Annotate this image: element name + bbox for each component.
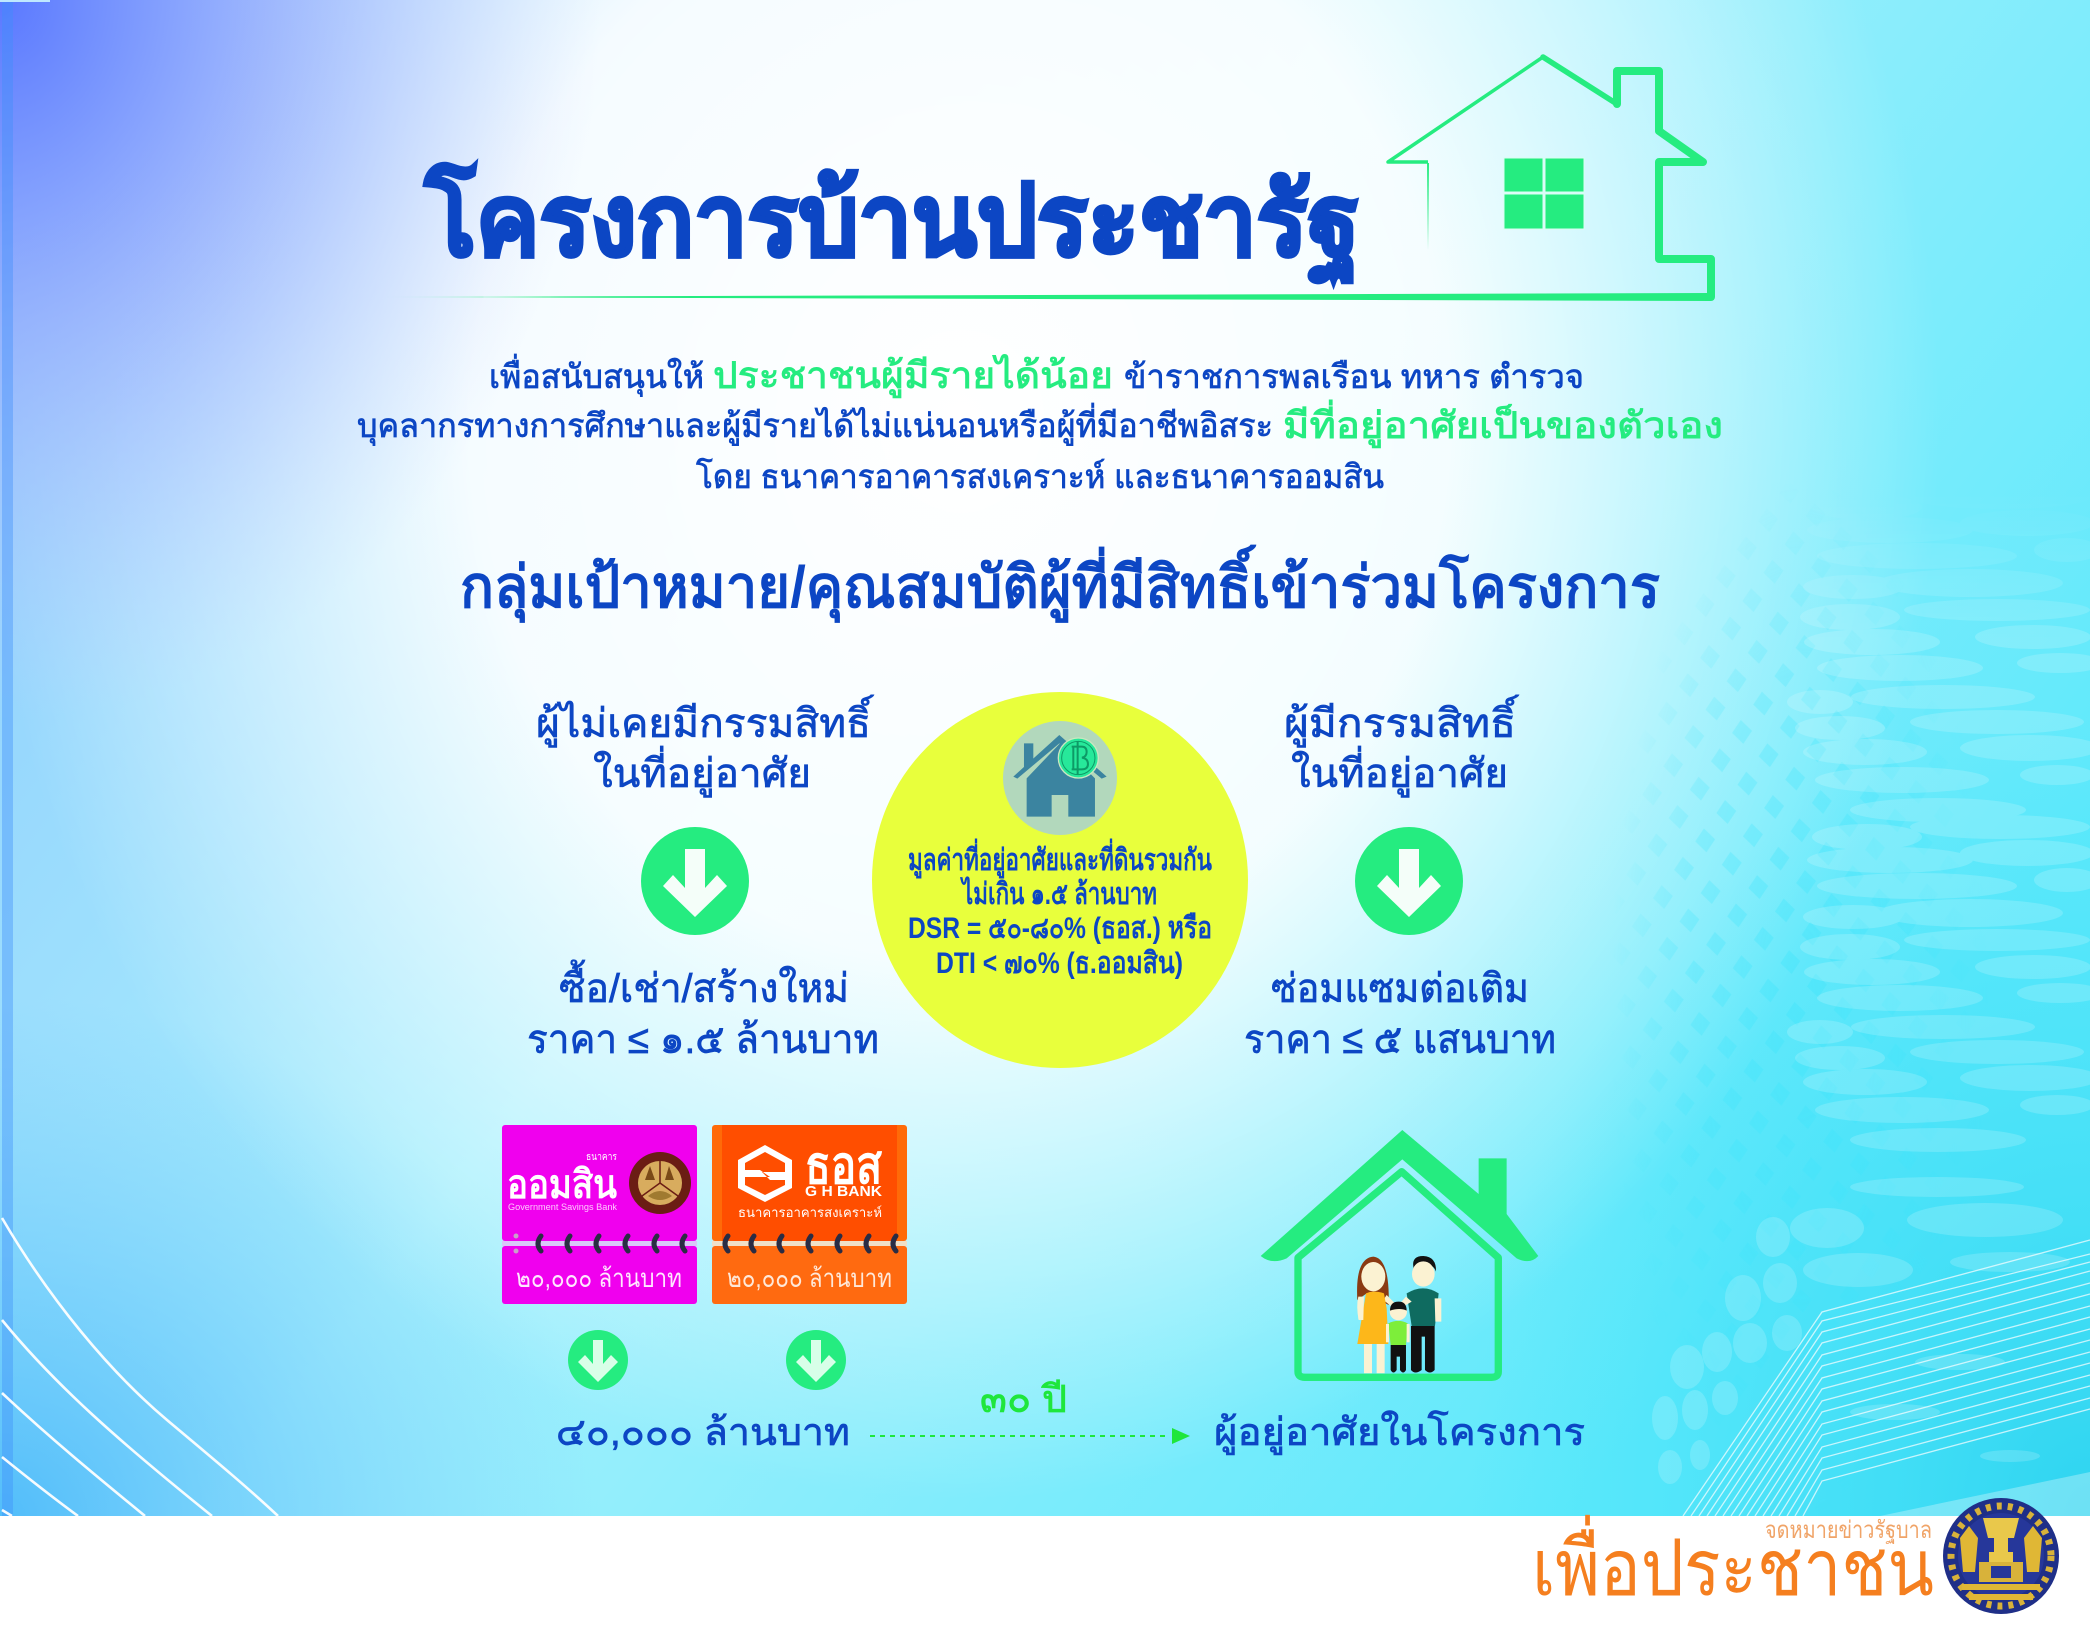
icon: down arrow: [1355, 827, 1463, 935]
right column: owners: ราคา ≤ ๕ แสนบาท: [1244, 1018, 1556, 1062]
panel: GH Bank card: G H BANK: [805, 1183, 882, 1200]
intro paragraph: มีที่อยู่อาศัยเป็นของตัวเอง: [1283, 399, 1723, 448]
icon: GSB seal: [629, 1152, 691, 1214]
decorative left stripe and curves: [2, 0, 13, 1516]
panel: GH Bank card: ธนาคารอาคารสงเคราะห์: [738, 1205, 882, 1220]
panel: GSB card: ออมสิน: [507, 1163, 617, 1207]
arrow: dashed: [870, 1428, 1190, 1444]
footer: brand text: จดหมายข่าวรัฐบาล: [1765, 1517, 1932, 1544]
binder rings: [538, 1236, 685, 1251]
icon: house with baht: [1003, 721, 1117, 835]
title: โครงการบ้านประชารัฐ: [424, 162, 1360, 286]
footer: brand text: เพื่อประชาชน: [1532, 1515, 1934, 1612]
right column: owners: [1244, 694, 1556, 1062]
panel: yellow criteria circle: DSR = ๕๐-๘๐% (ธอส.) หรือ: [908, 912, 1212, 945]
icon: government seal: [1943, 1498, 2059, 1614]
panel: yellow criteria circle: [872, 692, 1248, 1068]
footer: white band: [0, 1516, 2090, 1625]
heading: target group: กลุ่มเป้าหมาย/คุณสมบัติผู้ที่มีสิทธิ์เข้าร่วมโครงการ: [460, 544, 1660, 624]
panel: GSB card: Government Savings Bank: [508, 1202, 618, 1212]
panel: GH Bank card: ธอส: [805, 1137, 882, 1195]
left column: never owned: ในที่อยู่อาศัย: [593, 746, 811, 797]
panel: GSB card: ๒๐,๐๐๐ ล้านบาท: [516, 1263, 682, 1293]
panel: GSB card: ธนาคาร: [586, 1152, 618, 1163]
intro paragraph: เพื่อสนับสนุนให้: [489, 354, 704, 397]
panel: yellow criteria circle: มูลค่าที่อยู่อาศัยและที่ดินรวมกัน: [908, 838, 1212, 879]
icon: small down arrow right: [786, 1330, 846, 1390]
right column: owners: ในที่อยู่อาศัย: [1291, 746, 1508, 797]
intro paragraph: ประชาชนผู้มีรายได้น้อย: [713, 354, 1113, 398]
icon: outlined house with title underline: [380, 57, 1711, 301]
panel: GSB card: [502, 1125, 697, 1304]
residents label: ผู้อยู่อาศัยในโครงการ: [1214, 1410, 1585, 1455]
panel: yellow criteria circle: ไม่เกิน ๑.๕ ล้านบาท: [960, 876, 1157, 911]
panel: yellow criteria circle: DTI < ๗๐% (ธ.ออมสิน): [936, 947, 1183, 980]
icon: family house: [1261, 1130, 1538, 1377]
left column: never owned: ผู้ไม่เคยมีกรรมสิทธิ์: [536, 694, 874, 747]
intro paragraph: [357, 354, 1723, 495]
panel: GH Bank card: ๒๐,๐๐๐ ล้านบาท: [727, 1263, 892, 1293]
intro paragraph: โดย ธนาคารอาคารสงเคราะห์ และธนาคารออมสิน: [696, 458, 1384, 495]
intro paragraph: บุคลากรทางการศึกษาและผู้มีรายได้ไม่แน่นอนหรือผู้ที่มีอาชีพอิสระ: [357, 403, 1273, 446]
total amount: ๔๐,๐๐๐ ล้านบาท: [556, 1412, 850, 1454]
icon: window: [1504, 158, 1584, 229]
right column: owners: ซ่อมแซมต่อเติม: [1271, 967, 1529, 1011]
panel: GH Bank card: [712, 1125, 907, 1304]
family figures: [1357, 1256, 1441, 1373]
left column: never owned: ราคา ≤ ๑.๕ ล้านบาท: [527, 1018, 879, 1062]
intro paragraph: ข้าราชการพลเรือน ทหาร ตำรวจ: [1124, 358, 1584, 395]
duration label: ๓๐ ปี: [980, 1379, 1067, 1421]
right column: owners: ผู้มีกรรมสิทธิ์: [1284, 694, 1519, 747]
left column: never owned: ซื้อ/เช่า/สร้างใหม่: [559, 959, 849, 1011]
icon: small down arrow left: [568, 1330, 628, 1390]
icon: GH Bank logo: [738, 1145, 792, 1202]
binder rings: [725, 1236, 896, 1251]
left column: never owned: [527, 694, 879, 1062]
decorative fan lines: [1683, 1240, 2090, 1516]
icon: down arrow: [641, 827, 749, 935]
